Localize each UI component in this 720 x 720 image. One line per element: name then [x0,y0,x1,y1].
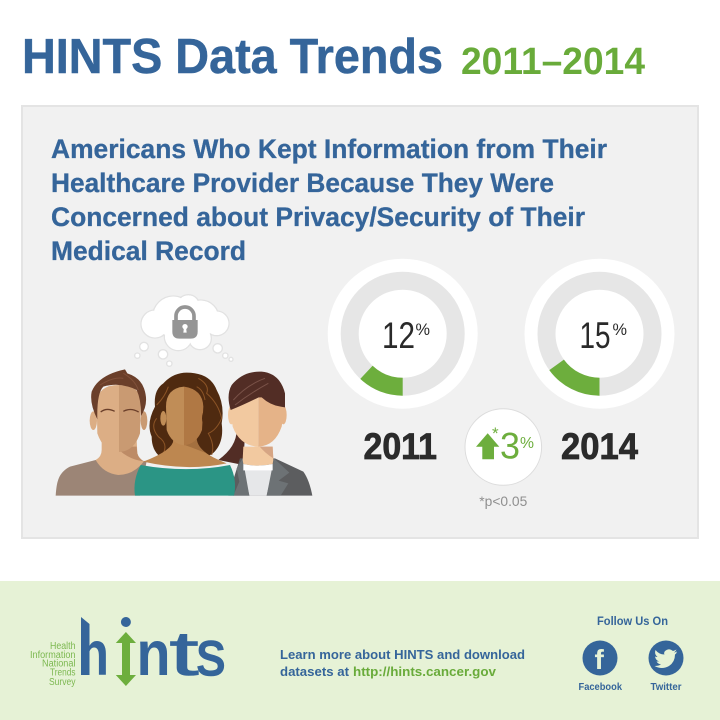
logo tagline: Trends [50,668,76,678]
logo tagline: Information [30,650,76,661]
logo tagline: National [42,658,76,670]
panel heading: Americans Who Kept Information from Their [51,134,607,164]
icon: Twitter [648,640,684,676]
logo tagline: Survey [49,677,76,688]
footer band [0,581,720,720]
donut chart: 2011 12%: % [416,320,430,339]
person: man [56,369,147,496]
person: woman with ponytail [218,372,312,496]
call to action [280,647,525,679]
social links: Facebook [578,681,622,693]
logo: HINTS: n [136,619,170,689]
call to action: Learn more about HINTS and download [280,647,525,662]
icon: Facebook: f [594,644,604,675]
person: woman with curly hair [134,373,235,496]
donut chart: 2011 12%: 12 [382,315,415,356]
logo tagline: Health [50,641,76,652]
panel heading [51,134,607,266]
year label 2011: 2011 [364,426,437,467]
callout: 3% increase: % [520,435,534,452]
social links: Twitter [650,681,682,693]
call to action: datasets at [280,664,350,679]
callout: 3% increase: * [492,424,499,443]
social links: Follow Us On [597,614,668,628]
logo: HINTS [30,617,226,689]
year label 2014: 2014 [561,426,638,467]
donut chart: 2014 15%: % [612,320,627,339]
callout: 3% increase [465,409,542,485]
logo tagline [30,641,76,688]
illustration: three people thinking about a lock [56,295,312,496]
callout: 3% increase: 3 [500,426,520,466]
panel heading: Medical Record [51,236,246,266]
donut chart: 2014 15% [524,259,674,409]
donut chart: 2014 15%: 15 [580,315,610,356]
footnote: *p<0.05 [479,493,527,509]
panel: privacy concern [22,106,698,538]
logo: HINTS: s [196,619,226,689]
call to action: http://hints.cancer.gov [353,664,497,679]
title: 2011–2014 [461,41,645,83]
donut chart: 2011 12% [328,259,478,409]
social links [578,614,684,693]
logo: HINTS: t [169,619,200,689]
icon: up arrow [476,433,499,459]
panel heading: Concerned about Privacy/Security of Their [51,202,585,232]
panel heading: Healthcare Provider Because They Were [51,168,554,198]
title: HINTS Data Trends [22,30,443,84]
icon: thought cloud with padlock [135,295,233,366]
logo: HINTS: h [78,619,109,689]
